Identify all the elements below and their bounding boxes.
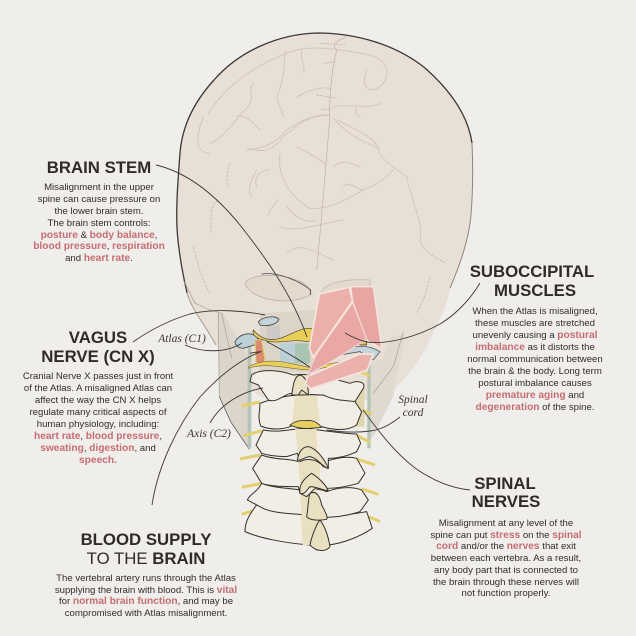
body: vagus nerve: regulate many critical aspects of xyxy=(29,407,167,418)
body: spinal nerves xyxy=(430,518,582,599)
body: suboccipital muscles: these muscles are stretched xyxy=(475,318,595,329)
body: spinal nerves: the brain through these nerves will xyxy=(433,577,579,588)
heading: suboccipital muscles: SUBOCCIPITAL xyxy=(470,262,594,281)
heading: vagus nerve: NERVE (CN X) xyxy=(41,347,155,366)
heading: blood supply: TO THE BRAIN xyxy=(87,549,205,568)
body: vagus nerve: speech. xyxy=(79,455,117,466)
leader: axis label xyxy=(210,388,263,423)
leader: brain stem xyxy=(156,165,307,337)
body: vagus nerve: heart rate, blood pressure, xyxy=(34,431,162,442)
body: brain stem: the lower brain stem. xyxy=(54,206,144,217)
body: spinal nerves: Misalignment at any level of the xyxy=(439,518,573,529)
body: spinal nerves: cord and/or the nerves that exit xyxy=(436,541,576,552)
body: blood supply: compromised with Atlas misalignment. xyxy=(65,608,227,619)
heading: suboccipital muscles: MUSCLES xyxy=(494,281,576,300)
spinous processes xyxy=(292,375,308,395)
heading: vagus nerve xyxy=(41,328,155,366)
body: brain stem xyxy=(33,182,165,264)
body: suboccipital muscles: When the Atlas is misaligned, xyxy=(472,306,598,317)
skull sutures and brain folds xyxy=(193,37,447,313)
C2 xyxy=(250,371,364,402)
leader: spinal cord xyxy=(327,417,400,432)
upper joint background xyxy=(260,310,320,373)
C3 xyxy=(259,395,362,430)
spinal cord strips xyxy=(248,347,371,448)
C5 xyxy=(253,455,365,497)
skull xyxy=(177,33,473,400)
leader: atlas label xyxy=(185,343,242,351)
grey neck side muscles xyxy=(183,280,405,449)
body: suboccipital muscles: degeneration of the spine. xyxy=(476,402,594,413)
spinal nerves xyxy=(240,369,380,522)
body: spinal nerves: not function properly. xyxy=(462,588,550,599)
anatomy label: Axis C2: Axis (C2) xyxy=(186,428,231,440)
body: vagus nerve: sweating, digestion, and xyxy=(40,443,156,454)
vertebrae xyxy=(245,371,372,551)
heading: suboccipital muscles xyxy=(470,262,594,300)
leader: blood supply xyxy=(152,352,260,505)
heading: blood supply: BLOOD SUPPLY xyxy=(81,530,211,549)
body: vagus nerve: Cranial Nerve X passes just in front xyxy=(23,371,174,382)
body: blood supply xyxy=(55,573,237,619)
body: vagus nerve: affect the way the CN X helps xyxy=(35,395,161,406)
leader: suboccipital xyxy=(345,283,480,343)
body: blood supply: for normal brain function, and may be xyxy=(59,596,233,607)
C4 xyxy=(256,428,361,468)
body: suboccipital muscles: postural imbalance causes xyxy=(478,378,592,389)
body: vagus nerve: human physiology, including: xyxy=(37,419,159,430)
cervical spine illustration xyxy=(183,280,405,551)
atlas C1 xyxy=(235,317,380,370)
leader: vagus nerve xyxy=(133,311,265,342)
body: suboccipital muscles xyxy=(467,306,603,413)
anatomy label: spinal cord: Spinal xyxy=(398,394,428,406)
heading: spinal nerves: NERVES xyxy=(472,492,540,511)
body: spinal nerves: any body part that is connected to xyxy=(434,565,578,576)
text block: blood supply to the brain xyxy=(55,530,237,619)
body: brain stem: and heart rate. xyxy=(65,253,133,264)
heading: spinal nerves xyxy=(472,474,540,511)
body: vagus nerve: of the Atlas. A misaligned Atlas can xyxy=(24,383,172,394)
body: vagus nerve xyxy=(23,371,174,466)
heading: blood supply xyxy=(81,530,211,568)
anatomy label: spinal cord: cord xyxy=(403,407,424,419)
text block: suboccipital muscles xyxy=(467,262,603,413)
body: blood supply: The vertebral artery runs through the Atlas xyxy=(56,573,236,584)
text block: brain stem xyxy=(33,158,165,264)
body: spinal nerves: spine can put stress on the spinal xyxy=(430,530,582,541)
body: brain stem: The brain stem controls: xyxy=(48,218,150,229)
body: brain stem: spine can cause pressure on xyxy=(38,194,160,205)
body: suboccipital muscles: normal communication between xyxy=(467,354,603,365)
body: spinal nerves: between each vertebra. As a result, xyxy=(431,553,581,564)
body: suboccipital muscles: the brain & the body. Long term xyxy=(468,366,602,377)
text block: vagus nerve xyxy=(23,328,174,466)
heading: brain stem: BRAIN STEM xyxy=(47,158,151,177)
leader: spinal nerves xyxy=(363,410,470,490)
anatomy label: Atlas C1: Atlas (C1) xyxy=(157,333,206,345)
heading: spinal nerves: SPINAL xyxy=(474,474,536,493)
body: brain stem: posture & body balance, xyxy=(41,230,157,241)
body: brain stem: Misalignment in the upper xyxy=(44,182,155,193)
text block: spinal nerves xyxy=(430,474,582,599)
C7 xyxy=(245,505,372,550)
body: suboccipital muscles: premature aging and xyxy=(486,390,584,401)
suboccipital muscles xyxy=(305,287,382,389)
body: blood supply: supplying the brain with blood. This is vital xyxy=(55,585,237,596)
body: brain stem: blood pressure, respiration xyxy=(33,241,165,252)
heading: vagus nerve: VAGUS xyxy=(69,328,127,347)
anatomy label: spinal cord xyxy=(398,394,428,419)
body: suboccipital muscles: imbalance as it distorts the xyxy=(475,342,595,353)
C6 xyxy=(247,483,368,520)
body: suboccipital muscles: unevenly causing a postural xyxy=(472,330,598,341)
